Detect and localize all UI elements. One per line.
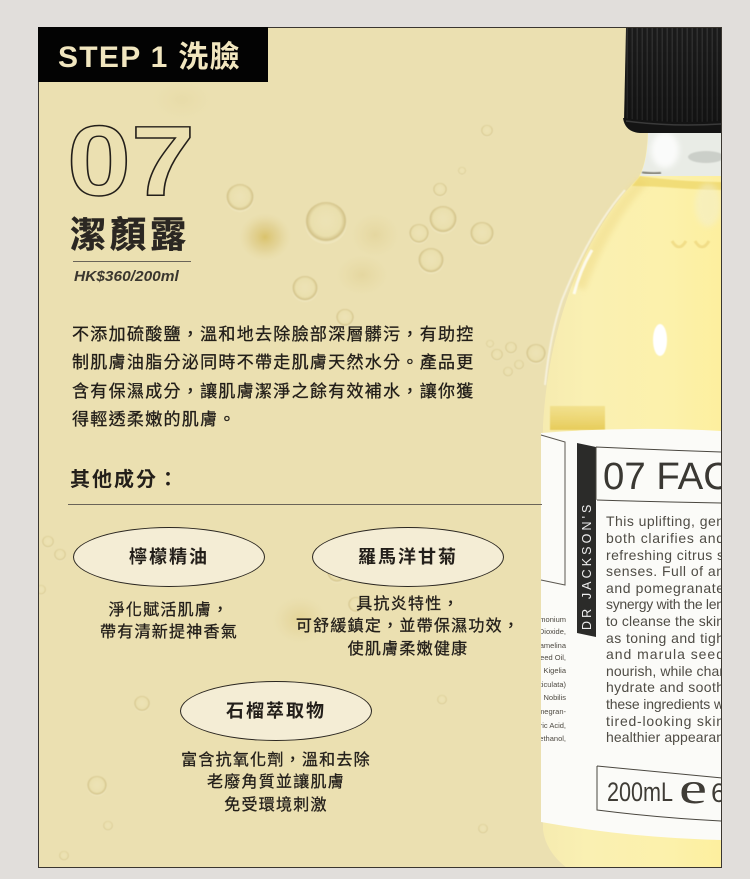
text: pomegranate benefit: 免受環境刺激 [224, 797, 328, 814]
text: pomegranate benefit: 老廢角質並讓肌膚 [207, 774, 345, 791]
ingredient small print: mmonium [533, 615, 566, 624]
label description: these ingredients w [606, 696, 725, 712]
label description: tired-looking skin [606, 713, 724, 729]
text: chamomile benefit: 可舒緩鎮定，並帶保濕功效， [296, 618, 520, 635]
ingredient small print: Citric Acid, [531, 721, 566, 730]
text: chamomile benefit [296, 595, 520, 658]
oval label: lemon [73, 527, 265, 587]
oval label: pomegranate [180, 681, 372, 741]
ingredient: pomegranate [180, 681, 372, 814]
oval label: pomegranate: 石榴萃取物 [226, 701, 326, 721]
ingredient small print: Nobilis [543, 693, 566, 702]
label description: hydrate and sooth [606, 679, 724, 695]
ingredient small print: Seed Oil, [535, 653, 566, 662]
divider under name [73, 261, 191, 262]
label description: nourish, while char [606, 663, 724, 679]
ingredient small print: Dioxide, [539, 627, 566, 636]
bottle glass shoulder [543, 130, 722, 868]
text: chamomile benefit: 具抗炎特性， [356, 596, 460, 613]
artwork: bubbles and bottle: 6 [711, 778, 726, 808]
label description: to cleanse the skin [606, 613, 724, 629]
artwork: bubbles and bottle: e [679, 764, 707, 813]
step heading banner [38, 27, 268, 82]
ingredient small print [541, 616, 566, 742]
ingredient: lemon oil [73, 527, 265, 641]
other ingredients heading: 其他成分： [70, 469, 180, 491]
label description: refreshing citrus s [606, 547, 724, 563]
description paragraph [72, 325, 475, 429]
black brand strip [577, 443, 596, 637]
ingredient small print: Camelina [534, 641, 567, 650]
ingredient small print: Reticulata) [530, 680, 566, 689]
label description: both clarifies and [606, 530, 724, 546]
text: lemon benefit: 帶有清新提神香氣 [100, 624, 238, 641]
black cap [623, 28, 722, 133]
oval label: lemon: 檸檬精油 [129, 547, 209, 567]
oval label: chamomile: 羅馬洋甘菊 [358, 547, 458, 567]
ingredient small print: oxyethanol, [528, 734, 566, 743]
left label box [541, 435, 565, 585]
oil surface [632, 176, 722, 190]
label description: synergy with the len [606, 596, 724, 612]
label description: This uplifting, gen [606, 513, 724, 529]
product name heading: 潔顏露 [70, 214, 190, 255]
label description [606, 513, 725, 745]
text: lemon benefit: 淨化賦活肌膚， [109, 602, 229, 619]
brand text: DR JACKSON'S [580, 502, 594, 630]
text: chamomile benefit: 使肌膚柔嫩健康 [348, 641, 468, 658]
description paragraph: 含有保濕成分，讓肌膚潔淨之餘有效補水，讓你獲 [72, 382, 475, 401]
bubbles [36, 125, 546, 861]
oval label: chamomile [312, 527, 504, 587]
step heading banner: STEP 1 洗臉 [58, 41, 241, 74]
text: pomegranate benefit [181, 751, 371, 814]
text: lemon benefit [100, 601, 238, 641]
text: pomegranate benefit: 富含抗氧化劑，溫和去除 [181, 752, 371, 769]
label description: senses. Full of an [606, 563, 724, 579]
background blots [152, 80, 399, 644]
label description: as toning and tigh [606, 630, 724, 646]
label description: and pomegranate [606, 580, 724, 596]
price: HK$360/200ml [74, 268, 179, 285]
bottle label [541, 429, 722, 840]
description paragraph: 不添加硫酸鹽，溫和地去除臉部深層髒污，有助控 [72, 325, 475, 344]
bottle neck glass [640, 130, 722, 176]
product name: 07 FAC [603, 456, 731, 498]
label description: healthier appearan [606, 729, 724, 745]
description paragraph: 制肌膚油脂分泌同時不帶走肌膚天然水分。產品更 [72, 353, 475, 372]
label frame [596, 447, 722, 821]
volume: 200mL [607, 777, 673, 807]
ingredient small print: Kigelia [543, 666, 567, 675]
ingredient: chamomile [296, 527, 520, 658]
description paragraph: 得輕透柔嫩的肌膚。 [72, 410, 237, 429]
bottle highlights [574, 250, 592, 294]
label description: and marula seed [606, 646, 724, 662]
bottle shoulder left shading [572, 178, 648, 290]
divider [68, 504, 542, 505]
ingredient small print: Pomegran- [529, 707, 566, 716]
